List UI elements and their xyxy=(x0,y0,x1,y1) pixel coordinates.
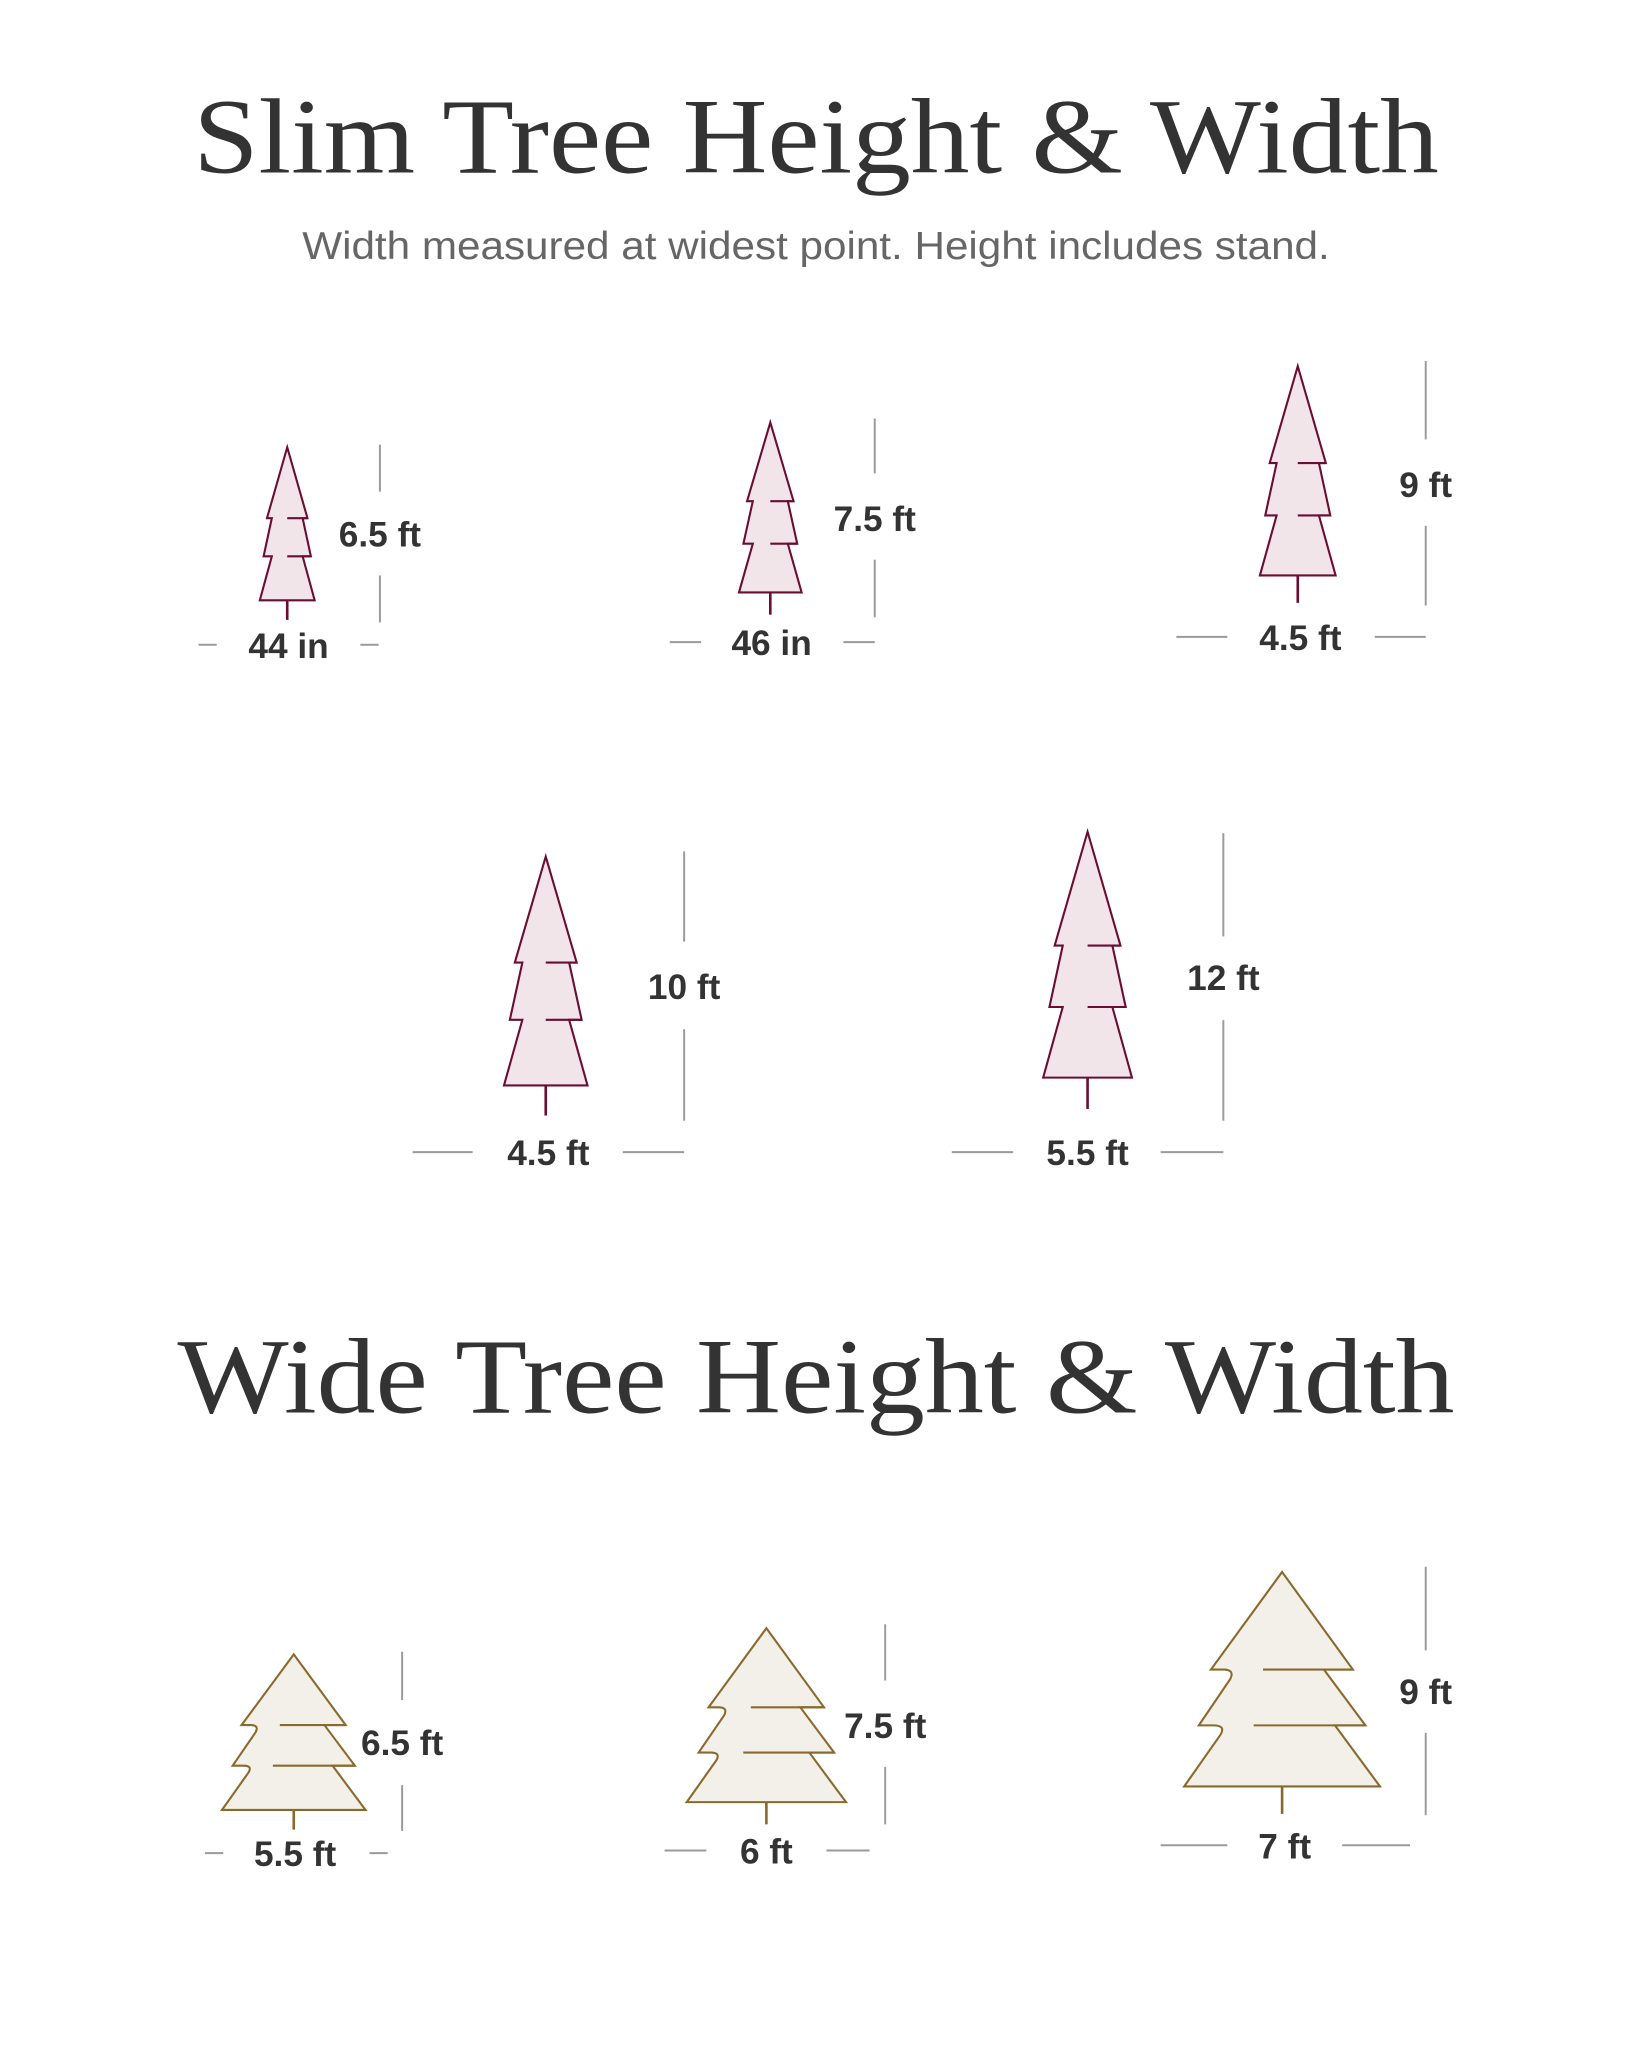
title: wide: Wide Tree Height & Width xyxy=(178,1318,1454,1436)
slim tree 5: 12 ft xyxy=(1187,959,1260,998)
wide tree 2: 6 ft xyxy=(740,1833,793,1872)
subtitle: Width measured at widest point. Height includes stand. xyxy=(302,225,1330,268)
wide tree 1 xyxy=(205,1652,443,1874)
title: slim: Slim Tree Height & Width xyxy=(193,79,1439,197)
wide tree 1: 6.5 ft xyxy=(361,1724,443,1763)
slim tree 5 xyxy=(952,832,1260,1173)
slim tree 2: 46 in xyxy=(731,624,812,663)
slim tree 3 xyxy=(1176,361,1452,658)
slim tree 2: 7.5 ft xyxy=(834,500,916,539)
wide tree 2: 7.5 ft xyxy=(844,1707,927,1746)
wide tree 1: 5.5 ft xyxy=(254,1835,336,1874)
slim tree 4: 4.5 ft xyxy=(507,1134,590,1173)
slim tree 3: 4.5 ft xyxy=(1259,619,1342,658)
wide tree 3: 9 ft xyxy=(1399,1673,1452,1712)
slim tree 3: 9 ft xyxy=(1399,466,1452,505)
wide tree 3 xyxy=(1161,1567,1452,1866)
slim tree 1: 6.5 ft xyxy=(339,516,421,555)
wide tree 2 xyxy=(665,1624,927,1872)
slim tree 4: 10 ft xyxy=(648,968,721,1007)
slim tree 1 xyxy=(198,445,421,666)
slim tree 5: 5.5 ft xyxy=(1046,1134,1129,1173)
wide tree 3: 7 ft xyxy=(1258,1827,1311,1866)
slim tree 2 xyxy=(670,418,916,663)
slim tree 1: 44 in xyxy=(248,627,329,666)
slim tree 4 xyxy=(413,851,721,1173)
